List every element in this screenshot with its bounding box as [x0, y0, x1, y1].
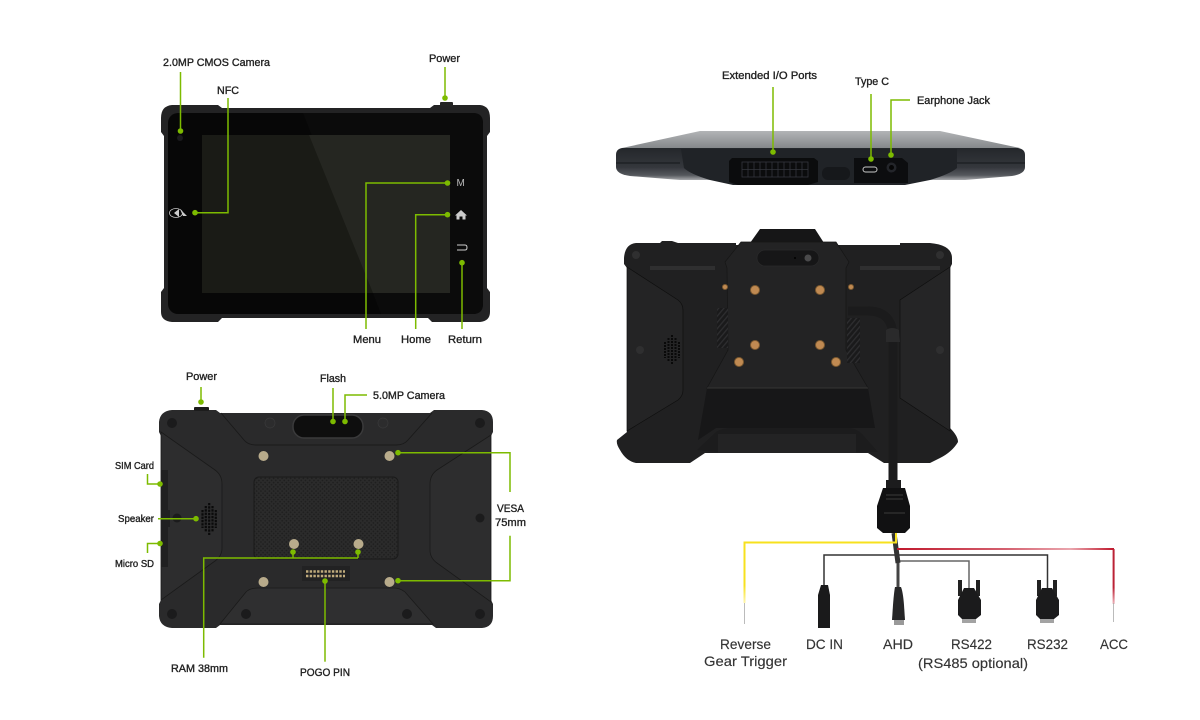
yellow wire	[744, 533, 896, 603]
label: Return	[448, 260, 482, 346]
label: Reverse Gear Trigger: Reverse	[720, 636, 771, 652]
lower stand skirt	[697, 428, 878, 452]
label: AHD: AHD	[883, 636, 913, 652]
connector: DC IN plug	[818, 585, 830, 628]
device: rear view with mounting bracket	[617, 229, 958, 463]
label: Home: Home	[401, 334, 431, 346]
label: 5.0MP Camera: 5.0MP Camera	[373, 390, 446, 402]
device: rear view of tablet	[159, 407, 493, 628]
label: RAM 38mm	[171, 549, 361, 675]
home key	[455, 210, 467, 220]
lower dark band	[698, 388, 875, 440]
bottom bracket	[220, 588, 433, 624]
device: front view of tablet	[161, 102, 490, 322]
label: POGO PIN	[300, 578, 350, 679]
center edge panel	[681, 149, 957, 185]
power button	[440, 102, 453, 106]
label: ACC: ACC	[1100, 636, 1128, 652]
label: Type C: Type C	[855, 76, 889, 88]
RS422 wire	[897, 561, 969, 590]
label: 2.0MP CMOS Camera: 2.0MP CMOS Camera	[163, 57, 271, 69]
connector block	[877, 488, 910, 533]
bracket top hook	[750, 229, 824, 243]
screen surface	[622, 131, 1020, 148]
camera recess	[757, 250, 819, 266]
label: RAM 38mm: RAM 38mm	[171, 663, 228, 675]
label: Power front: Power	[429, 53, 460, 65]
label: Micro SD	[115, 541, 163, 570]
Type C and earphone recess	[854, 158, 908, 183]
label: Reverse Gear Trigger	[704, 636, 787, 669]
label: Earphone Jack: Earphone Jack	[917, 95, 990, 107]
label: POGO PIN: POGO PIN	[300, 667, 350, 679]
center oval recess	[822, 167, 850, 180]
label: Flash: Flash	[320, 373, 346, 385]
label: Power rear	[186, 371, 217, 405]
right panel	[900, 267, 950, 431]
label: Menu: Menu	[353, 334, 381, 346]
label: 5.0MP Camera	[342, 390, 446, 424]
label: SIM Card: SIM Card	[115, 461, 154, 472]
label: Speaker: Speaker	[118, 514, 155, 525]
stem	[894, 533, 898, 563]
label: RS232: RS232	[1027, 636, 1068, 652]
highlight band	[650, 266, 940, 270]
DC IN and RS232 wire	[824, 555, 1048, 590]
camera bar	[293, 415, 363, 438]
label: Speaker	[118, 514, 199, 525]
device: bottom edge view of tablet	[616, 131, 1025, 185]
left panel	[627, 267, 683, 431]
VESA mount screws	[258, 451, 394, 587]
screen glare	[309, 135, 450, 293]
connector: RS422 plug	[958, 580, 981, 623]
label: Reverse Gear Trigger: Gear Trigger	[704, 653, 787, 669]
label: 2.0MP CMOS Camera	[163, 57, 271, 134]
POGO pin connector	[302, 566, 350, 581]
red wire	[897, 548, 1114, 550]
label: Flash	[320, 373, 346, 424]
cable: main cable from tablet to connector	[848, 311, 910, 533]
AHD wire	[896, 560, 900, 590]
connector: AHD plug	[892, 587, 905, 625]
label: Extended I/O Ports	[722, 70, 818, 155]
label: NFC	[192, 85, 239, 216]
label: RS485 optional: (RS485 optional)	[918, 655, 1028, 671]
label: Earphone Jack	[888, 95, 990, 158]
corner screws	[167, 418, 485, 619]
label: Type C	[855, 76, 889, 162]
label: VESA 75mm: 75mm	[495, 517, 526, 529]
card slots	[161, 470, 170, 567]
side vents	[717, 308, 728, 348]
mount plate	[707, 242, 868, 388]
label: Micro SD: Micro SD	[115, 559, 154, 570]
label: Power rear: Power	[186, 371, 217, 383]
label: DC IN: DC IN	[806, 636, 843, 652]
extended I/O port	[729, 158, 818, 185]
speaker grille	[665, 335, 679, 365]
side screws	[632, 251, 944, 354]
label: Extended I/O Ports: Extended I/O Ports	[722, 70, 818, 82]
return key	[457, 245, 467, 250]
top bracket	[221, 413, 432, 445]
NFC icon	[170, 208, 187, 218]
left side panel	[161, 432, 222, 600]
front camera lens	[177, 135, 183, 141]
label: Home	[401, 212, 450, 346]
right side panel	[430, 435, 491, 602]
label: SIM Card	[115, 461, 163, 487]
front screen	[202, 135, 450, 293]
brass bracket screws	[722, 284, 854, 366]
label: Menu	[353, 180, 450, 346]
edge body	[616, 148, 1025, 180]
cable: breakout wires	[744, 533, 1115, 624]
label: VESA 75mm: VESA	[497, 503, 525, 515]
label: NFC: NFC	[217, 85, 239, 97]
RAM mount screws	[289, 539, 364, 549]
label: Return: Return	[448, 334, 482, 346]
connector: RS232 plug	[1036, 580, 1059, 623]
label: RS422: RS422	[951, 636, 992, 652]
label: VESA 75mm	[395, 450, 526, 584]
M key: M	[456, 178, 465, 189]
speaker grille	[202, 503, 216, 535]
power button rear	[194, 407, 209, 411]
label: Power front	[429, 53, 460, 101]
mesh plate	[254, 477, 398, 559]
tablet body	[617, 241, 958, 463]
